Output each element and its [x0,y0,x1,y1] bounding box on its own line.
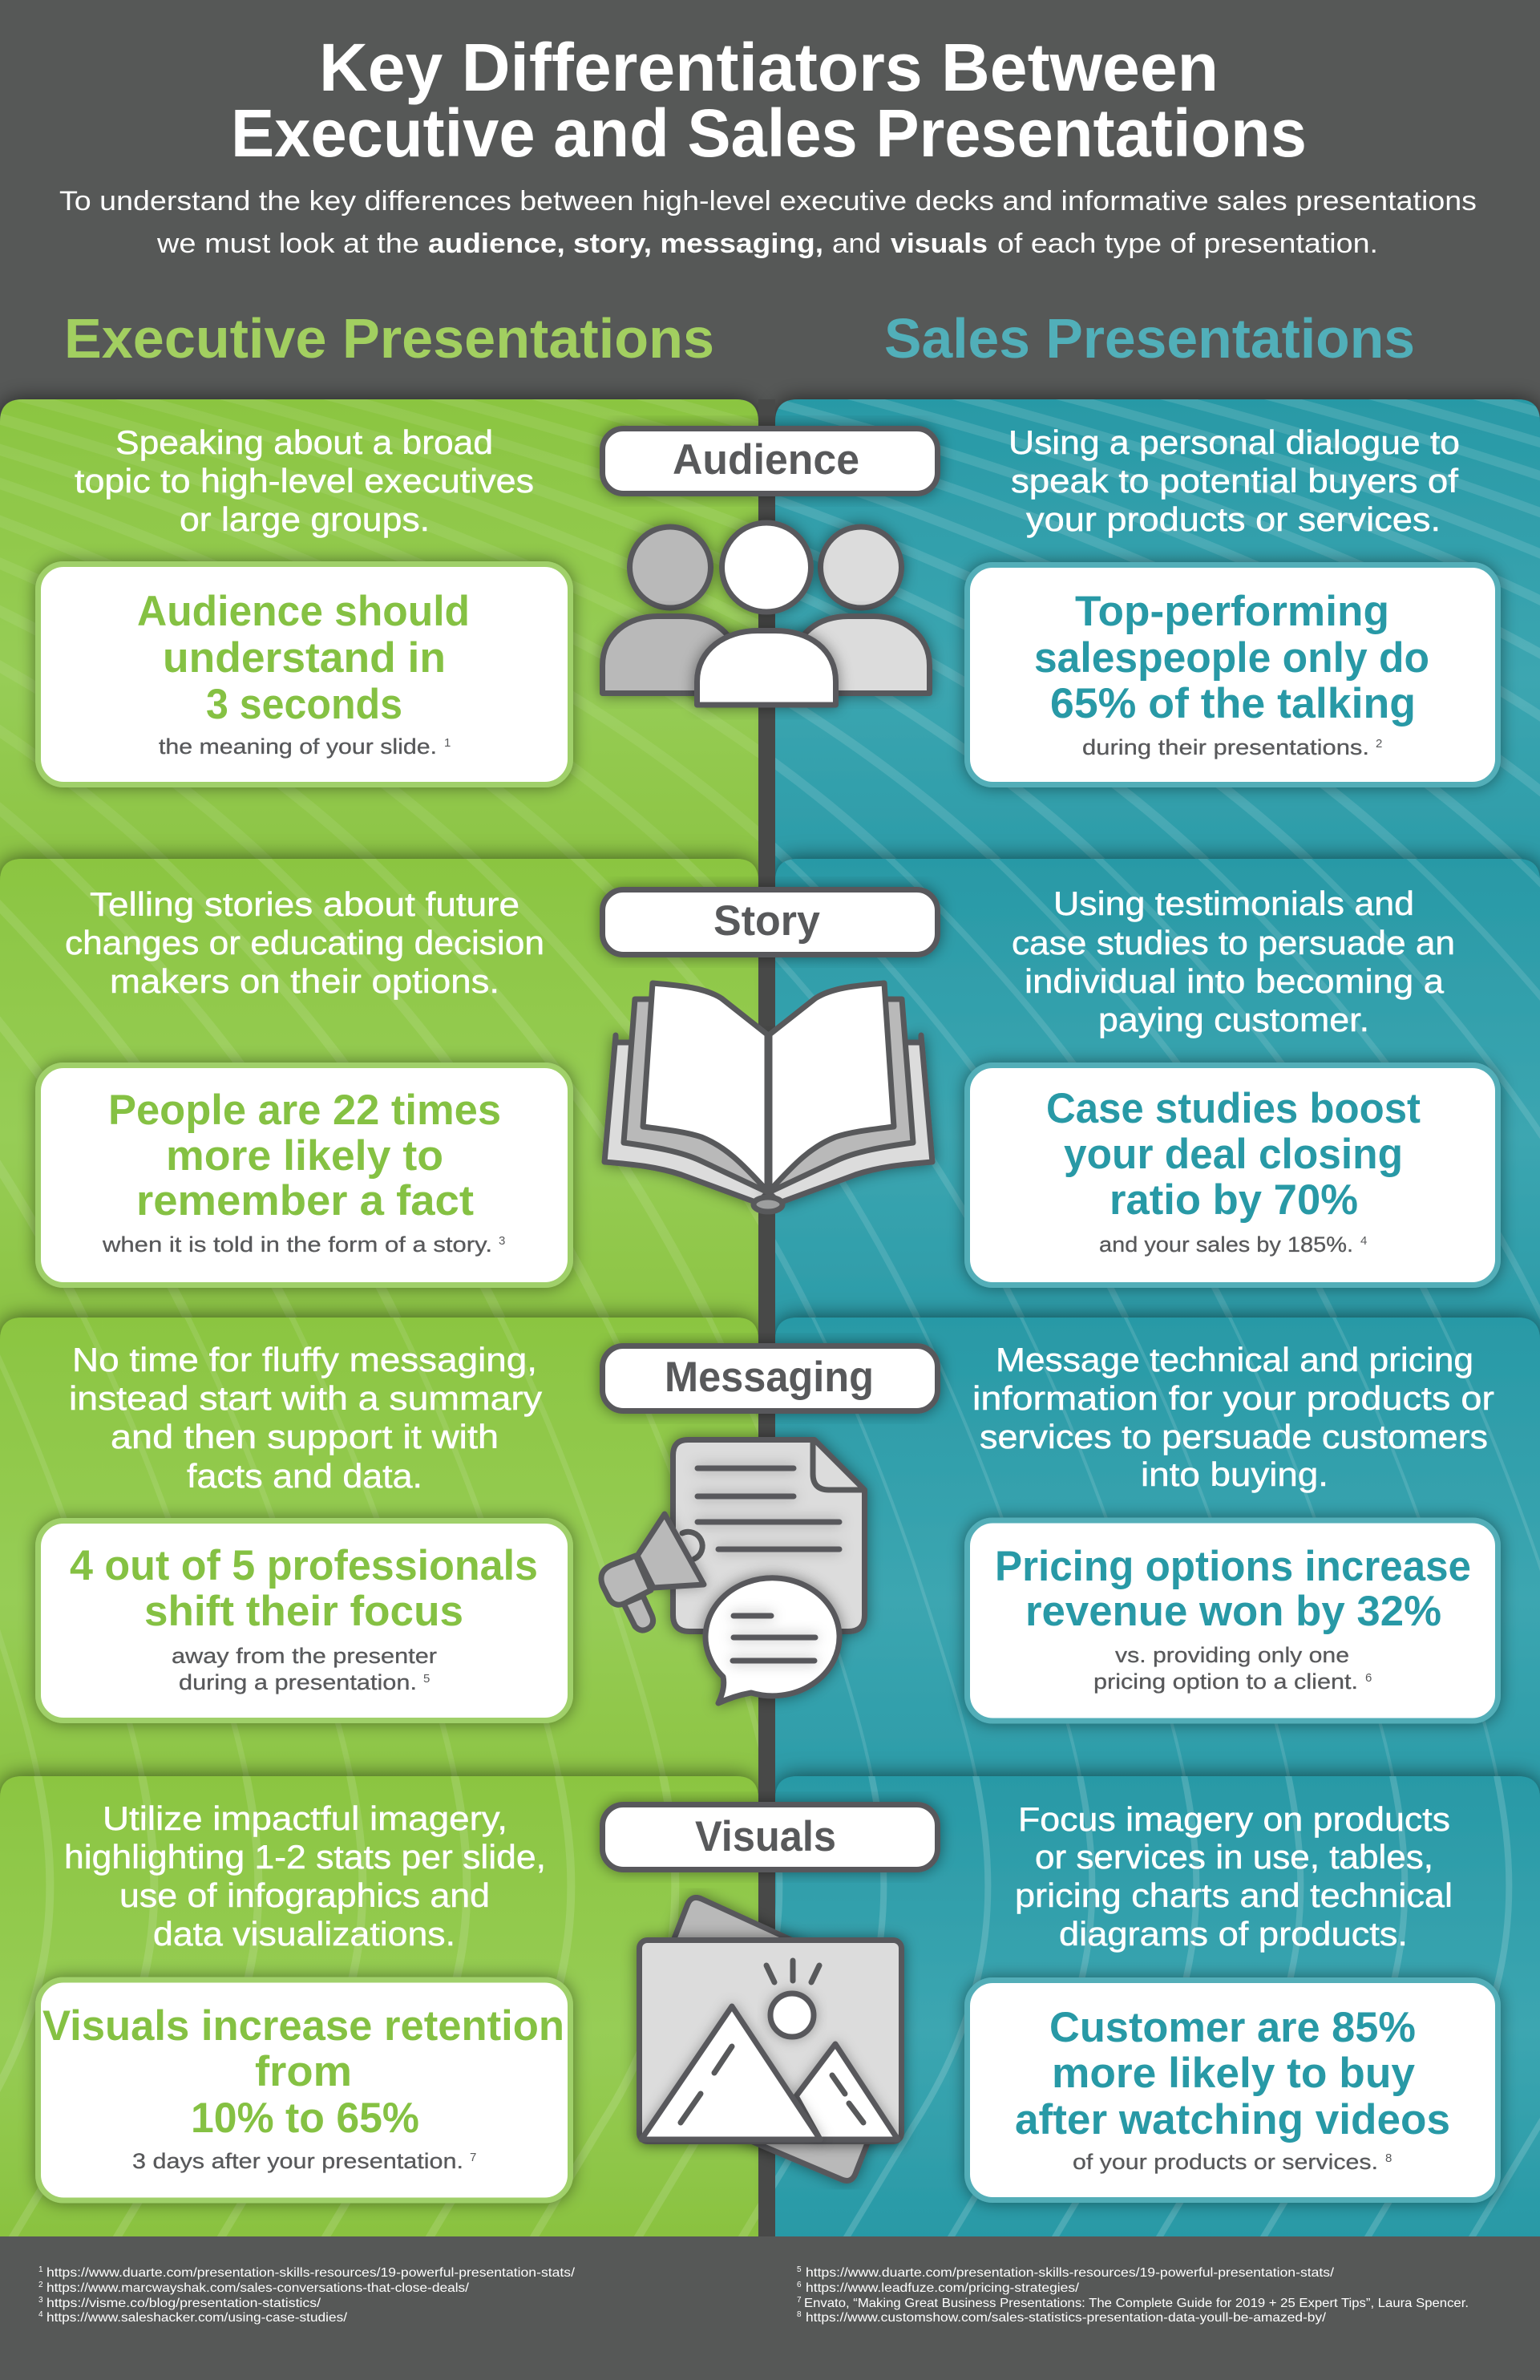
callout: visuals increase retention: 10% to 65% [191,2095,419,2142]
callout: pricing options: pricing option to a client. [1093,1670,1358,1694]
text: sales audience description [1008,423,1460,538]
callout: case studies boost [967,1065,1498,1285]
text: sales audience description: speak to potential buyers of [1011,462,1458,500]
footnotes: left column: https://www.duarte.com/presentation-skills-resources/19-powerful-presentation-stats/ [46,2266,576,2280]
footer band [0,2236,1540,2380]
text: sales visuals description: diagrams of products. [1059,1915,1408,1953]
callout: visuals increase retention [38,1980,571,2200]
text: sales visuals description: Focus imagery on products [1018,1800,1450,1838]
callout: case studies boost: ratio by 70% [1110,1176,1358,1224]
callout: customers 85%: 8 [1385,2151,1392,2165]
panel: executive story background [0,844,758,1339]
text: executive audience description [75,423,534,538]
footnotes: left column: https://www.marcwayshak.com/sales-conversations-that-close-deals/ [46,2281,470,2295]
panel: sales messaging background [775,1304,1540,1797]
text: sales messaging description: information for your products or [972,1379,1494,1417]
footnotes: left column: https://www.saleshacker.com/using-case-studies/ [46,2311,348,2325]
callout: visuals increase retention: from [255,2048,352,2095]
footnotes: right column: https://www.leadfuze.com/pricing-strategies/ [806,2281,1080,2295]
callout: audience 3 seconds: 1 [444,736,451,750]
text: sales messaging description: into buying. [1141,1455,1328,1493]
callout: case studies boost: 4 [1360,1234,1367,1248]
footnotes: right column: 8 [797,2310,802,2319]
callout: 4 out of 5 professionals: during a presentation. [179,1670,417,1694]
heading: executive presentations: Executive Presentations [64,307,714,370]
footnotes: right column: https://www.customshow.com/sales-statistics-presentation-data-youll-be-amazed-by/ [806,2311,1327,2325]
icon: open book [604,983,932,1212]
panel: executive messaging background [0,1302,758,1798]
text: executive visuals description [64,1799,546,1953]
intro text: audience, story, messaging, [428,229,823,259]
label: messaging [603,1346,938,1411]
callout: top-performing salespeople: 65% of the talking [1050,680,1416,727]
callout: case studies boost: your deal closing [1064,1131,1403,1178]
callout: 4 out of 5 professionals: shift their focus [144,1588,463,1635]
footnotes: right column: Envato, “Making Great Business Presentations: The Complete Guide for 2019 + 25 Expert Tips”, Laura Spencer. [804,2297,1469,2310]
panel: sales story background [775,845,1540,1338]
text: executive story description: makers on their options. [110,962,499,1000]
footnotes: left column: 4 [38,2310,43,2319]
callout: audience 3 seconds: 3 seconds [206,681,402,728]
centre divider bar [758,399,775,2236]
callout: customers 85%: of your products or services. [1073,2150,1378,2174]
text: executive messaging description: No time for fluffy messaging, [72,1341,537,1378]
callout: case studies boost: and your sales by 185%. [1099,1232,1353,1257]
text: executive visuals description: use of infographics and [119,1876,490,1914]
panel: executive visuals background [0,1761,758,2236]
text: sales messaging description: services to persuade customers [980,1418,1488,1455]
footnotes: right column: https://www.duarte.com/presentation-skills-resources/19-powerful-presentation-stats/ [806,2266,1335,2280]
callout: audience 3 seconds: understand in [163,634,446,682]
text: executive messaging description: instead start with a summary [69,1379,542,1417]
heading: sales presentations: Sales Presentations [884,307,1415,370]
callout: case studies boost: Case studies boost [1046,1085,1421,1132]
footnotes: left column: 1 [38,2265,43,2274]
footnotes: left column: 3 [38,2296,43,2305]
text: executive audience description: Speaking about a broad [115,423,493,461]
callout: audience 3 seconds: the meaning of your slide. [159,735,437,759]
title: Executive and Sales Presentations [231,95,1307,171]
panel: executive audience background [0,390,758,880]
footnotes: right column: 7 [797,2296,802,2305]
callout: top-performing salespeople: Top-performing [1075,588,1389,635]
callout: audience 3 seconds: Audience should [137,588,470,635]
callout: top-performing salespeople: during their presentations. [1082,735,1369,759]
callout: 4 out of 5 professionals [38,1520,571,1721]
intro text: visuals [891,229,988,259]
text: sales messaging description: Message technical and pricing [996,1341,1473,1378]
callout: people 22 times: People are 22 times [108,1087,501,1134]
text: sales audience description: your products or services. [1026,500,1441,538]
icon: document, megaphone and speech bubble [601,1440,864,1703]
callout: top-performing salespeople: 2 [1376,737,1382,751]
text: sales story description: Using testimonials and [1053,884,1414,922]
callout: pricing options: Pricing options increase [995,1543,1471,1590]
callout: 4 out of 5 professionals: 4 out of 5 professionals [70,1542,538,1589]
label: audience: Audience [673,436,859,484]
text: sales visuals description: pricing charts and technical [1015,1876,1453,1914]
callout: customers 85%: after watching videos [1015,2096,1450,2143]
text: sales story description: case studies to persuade an [1012,924,1455,961]
footnotes: left column [38,2265,576,2325]
text: sales audience description: Using a personal dialogue to [1008,423,1460,461]
text: executive messaging description: and then support it with [111,1418,499,1455]
text: executive visuals description: data visualizations. [153,1915,455,1953]
callout: people 22 times [38,1065,571,1285]
callout: visuals increase retention: 7 [470,2151,476,2164]
footnotes: right column [797,2265,1469,2325]
callout: top-performing salespeople: salespeople only do [1034,634,1429,682]
text: sales visuals description: or services in use, tables, [1035,1838,1433,1876]
callout: people 22 times: more likely to [166,1132,443,1180]
callout: pricing options: 6 [1365,1671,1372,1685]
footnotes: left column: https://visme.co/blog/presentation-statistics/ [46,2297,321,2310]
callout: customers 85% [967,1981,1498,2200]
intro text: To understand the key differences between high-level executive decks and informative sales presentations [59,186,1477,217]
panel: sales audience background [775,390,1540,880]
label: story: Story [713,897,821,945]
label: audience [603,428,938,494]
callout: people 22 times: 3 [499,1234,505,1248]
text: sales visuals description [1015,1800,1453,1953]
text: executive audience description: or large groups. [180,500,430,538]
callout: top-performing salespeople [967,565,1498,784]
title: Key Differentiators Between [319,30,1219,105]
callout: customers 85%: more likely to buy [1052,2050,1416,2097]
panel: sales visuals background [775,1763,1540,2236]
icon: pictures with mountains [640,1897,901,2180]
callout: visuals increase retention: 3 days after your presentation. [132,2149,463,2173]
text: executive visuals description: highlighting 1-2 stats per slide, [64,1838,546,1876]
intro text [59,186,1477,259]
callout: people 22 times: remember a fact [136,1177,474,1224]
text: executive messaging description: facts and data. [187,1457,422,1495]
label: story [603,890,938,954]
title [231,30,1307,171]
callout: 4 out of 5 professionals: away from the presenter [172,1644,437,1668]
callout: 4 out of 5 professionals: 5 [423,1672,430,1686]
text: executive story description [65,885,544,1000]
intro text: and [832,229,881,259]
callout: customers 85%: Customer are 85% [1049,2004,1416,2051]
callout: people 22 times: when it is told in the form of a story. [102,1232,492,1257]
label: messaging: Messaging [665,1354,874,1401]
text: sales story description: paying customer. [1098,1001,1369,1038]
text: sales messaging description [972,1341,1494,1493]
intro text: of each type of presentation. [997,229,1378,259]
text: sales story description: individual into becoming a [1025,962,1445,1000]
label: visuals: Visuals [695,1813,836,1860]
icon: audience people [603,523,930,705]
callout: audience 3 seconds [38,565,571,784]
footnotes: right column: 5 [797,2265,802,2274]
callout: pricing options [967,1520,1498,1721]
footnotes: left column: 2 [38,2281,43,2289]
text: executive messaging description [69,1341,542,1495]
footnotes: right column: 6 [797,2281,802,2289]
text: executive visuals description: Utilize impactful imagery, [103,1799,507,1837]
callout: visuals increase retention: Visuals increase retention [42,2002,564,2050]
text: executive audience description: topic to high-level executives [75,462,534,500]
text: executive story description: Telling stories about future [90,885,519,923]
text: sales story description [1012,884,1455,1038]
intro text: we must look at the [156,229,419,259]
callout: pricing options: vs. providing only one [1115,1643,1349,1667]
callout: pricing options: revenue won by 32% [1025,1588,1441,1635]
text: executive story description: changes or educating decision [65,924,544,961]
label: visuals [603,1804,938,1870]
